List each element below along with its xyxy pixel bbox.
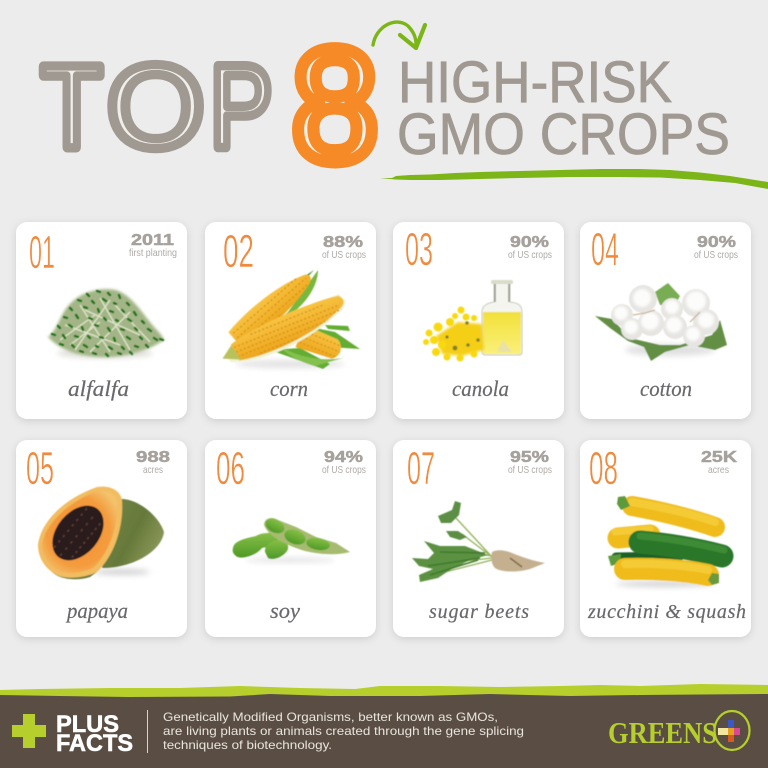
number 03: 03 [405, 223, 433, 275]
stat: 988 [136, 449, 170, 466]
icon: alfalfa sprouts [48, 289, 164, 358]
stat: 94% [324, 449, 363, 466]
icon: plus [12, 714, 46, 748]
panel: papaya [16, 440, 187, 637]
stat: 90% [510, 234, 549, 251]
icon: green curved arrow [373, 22, 425, 48]
panel: zucchini and squash [580, 440, 751, 637]
number 08: 08 [589, 442, 618, 494]
text: GMO definition [163, 710, 524, 752]
number 02: 02 [223, 225, 254, 277]
text: GMO definition: Genetically Modified Organisms, better known as GMOs, [163, 710, 498, 724]
heading: plus facts: PLUS [56, 711, 119, 738]
title: HIGH-RISK GMO CROPS [397, 50, 730, 167]
icon: canola oil bottle and flowers [423, 280, 522, 362]
text: GMO definition: techniques of biotechnology. [163, 738, 332, 752]
label: corn [270, 376, 308, 401]
icon: corn cobs [216, 266, 360, 372]
heading: plus facts [56, 711, 133, 757]
panel: canola [393, 222, 564, 419]
stat caption: acres [708, 464, 729, 476]
panel: sugar beets [393, 440, 564, 637]
stat caption: acres [143, 464, 163, 476]
label: papaya [65, 598, 128, 623]
number 01: 01 [29, 226, 55, 278]
title: HIGH-RISK GMO CROPS: GMO CROPS [397, 102, 730, 167]
label: cotton [640, 376, 692, 401]
number 05: 05 [26, 442, 54, 494]
icon: zucchini and squash [608, 496, 724, 587]
icon: cotton bolls [595, 283, 727, 361]
title: 8: 8 [292, 17, 378, 194]
title: HIGH-RISK GMO CROPS: HIGH-RISK [398, 50, 672, 115]
title: TOP: T [41, 42, 102, 173]
panel: alfalfa [16, 222, 187, 419]
stat: 2011 [131, 232, 174, 249]
stat: 88% [323, 234, 363, 251]
divider [147, 710, 148, 753]
label: soy [270, 598, 300, 623]
title: TOP: P [210, 42, 272, 172]
panel: cotton [580, 222, 751, 419]
icon: sugar beet [412, 501, 545, 582]
footer background [0, 694, 768, 768]
stat caption: of US crops [508, 464, 552, 476]
label: sugar beets [429, 601, 529, 623]
footer band [0, 684, 768, 768]
title: TOP: P [210, 42, 272, 172]
text: GMO definition: are living plants or animals created through the gene splicing [163, 724, 524, 738]
stat: 90% [697, 234, 736, 251]
number 04: 04 [591, 223, 619, 275]
lime brush edge [0, 684, 768, 700]
brush stroke underline [380, 169, 768, 189]
title: TOP [41, 41, 272, 173]
stat caption: of US crops [322, 249, 366, 261]
panel: corn [205, 222, 376, 419]
stat caption: of US crops [694, 249, 738, 261]
heading: plus facts: FACTS [56, 730, 133, 757]
stat caption: of US crops [322, 464, 366, 476]
stat: 95% [510, 449, 549, 466]
stat caption: first planting [129, 247, 177, 259]
stat: 25K [701, 449, 738, 466]
icon: papaya [38, 487, 164, 579]
title: TOP: O [107, 41, 204, 172]
logo: Greens plus: GREENS [608, 715, 717, 750]
title: TOP: O [107, 41, 204, 172]
label: canola [452, 376, 509, 401]
label: zucchini & squash [587, 601, 746, 623]
icon: soy beans [233, 516, 350, 562]
title: TOP: T [41, 42, 102, 173]
number 06: 06 [216, 442, 245, 494]
label: alfalfa [68, 376, 129, 401]
title: 8: 8 [292, 17, 378, 194]
panel: soy [205, 440, 376, 637]
stat caption: of US crops [508, 249, 552, 261]
number 07: 07 [407, 442, 435, 494]
